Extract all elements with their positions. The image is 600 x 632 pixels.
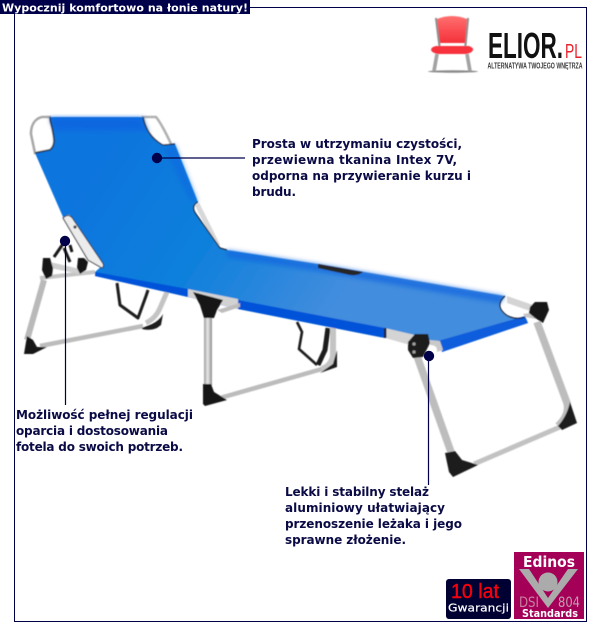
logo: Elior.pl <box>428 16 583 73</box>
leader line: fabric <box>157 157 245 159</box>
fabric shading: seat bottom edge <box>95 272 385 338</box>
headrest right corner <box>143 117 172 146</box>
text: backrest: Możliwość pełnej regulacji <box>16 408 193 422</box>
title: Wypocznij komfortowo na łonie natury! <box>2 2 248 14</box>
text: frame: aluminiowy ułatwiający <box>285 501 445 515</box>
sun lounger illustration <box>24 117 577 477</box>
fabric shading: seat top edge <box>227 250 505 303</box>
fabric shading: edge of backrest <box>165 144 198 202</box>
icon: red chair <box>428 16 478 73</box>
text: fabric: odporna na przywieranie kurzu i <box>252 169 471 183</box>
logo domain: PL <box>565 41 582 63</box>
badge: Edinos standards <box>514 552 584 620</box>
text: backrest: oparcia i dostosowania <box>16 424 168 438</box>
fabric <box>35 117 528 352</box>
middle leg <box>204 316 333 398</box>
callout: fabric <box>152 137 471 199</box>
rear foot <box>24 336 47 354</box>
text: fabric: przewiewna tkanina Intex 7V, <box>252 153 457 167</box>
fabric shading: top of backrest <box>50 117 150 131</box>
fabric shading: seat foot edge <box>438 316 528 352</box>
fabric outlines <box>35 117 525 318</box>
text: fabric: brudu. <box>252 185 296 199</box>
text: frame: Lekki i stabilny stelaż <box>285 485 429 499</box>
centre bracket <box>188 289 240 318</box>
headrest left corner <box>31 117 54 153</box>
recline mechanism <box>42 241 88 279</box>
text: frame: sprawne złożenie. <box>285 533 406 547</box>
front foot right <box>558 402 577 430</box>
side hinge plate <box>63 216 104 268</box>
foot-end bracket <box>384 328 443 358</box>
text: backrest: fotela do swoich potrzeb. <box>16 440 183 454</box>
side tube of backrest <box>197 204 218 246</box>
text: frame: przenoszenie leżaka i jego <box>285 517 462 531</box>
text: fabric: Prosta w utrzymaniu czystości, <box>252 137 462 151</box>
front legs <box>417 322 568 464</box>
marker: frame <box>424 351 434 361</box>
marker: backrest <box>60 236 70 246</box>
rear corner <box>142 314 163 330</box>
middle corner <box>320 350 337 373</box>
seat side handle <box>318 264 363 275</box>
badge: Edinos standards: Edinos <box>523 553 575 571</box>
end bracket <box>507 296 549 323</box>
front foot left <box>445 451 478 477</box>
leader line: backrest <box>64 241 66 405</box>
badge: Edinos standards: 804 <box>558 595 580 611</box>
badge: 10 year warranty: 10 lat <box>451 581 499 603</box>
middle foot <box>203 384 227 406</box>
badge: Edinos standards: DSI <box>519 595 539 611</box>
callout: frame <box>285 351 462 547</box>
rear leg <box>27 272 167 346</box>
marker: fabric <box>152 153 162 163</box>
badge: 10 year warranty: Gwarancji <box>448 602 509 614</box>
badge: 10 year warranty <box>446 579 511 619</box>
leader line: frame <box>428 356 430 485</box>
callout: backrest <box>16 236 193 454</box>
badge: Edinos standards: Standards <box>522 607 578 620</box>
straps <box>117 283 328 365</box>
